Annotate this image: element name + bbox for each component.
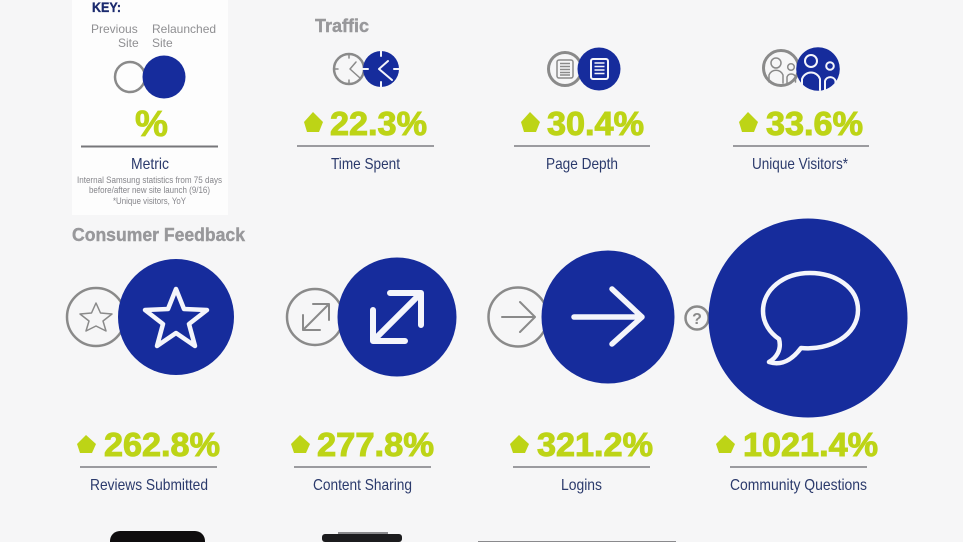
icon: question: ? [692, 311, 702, 328]
key label: relaunched site: Site [152, 36, 173, 50]
device: phone top edge [110, 531, 205, 542]
heading: traffic: Traffic [315, 16, 369, 36]
stat: time spent [297, 105, 434, 173]
key footnote: *Unique visitors, YoY [113, 196, 186, 206]
icon: clock [334, 51, 399, 87]
icon: share [287, 258, 456, 376]
icon: star [67, 259, 234, 375]
key footnote: before/after new site launch (9/16) [89, 185, 210, 195]
stat: time spent: Time Spent [331, 156, 400, 173]
icon: speech bubble [708, 218, 908, 418]
stat: community questions: Community Questions [730, 477, 867, 494]
key circles [115, 56, 186, 98]
stat: page depth: Page Depth [546, 156, 618, 173]
arrow up [304, 112, 323, 132]
panel: key [72, 0, 228, 215]
arrow up [510, 435, 529, 453]
arrow up [291, 435, 310, 453]
arrow up [77, 435, 96, 453]
stat: community questions: 1021.4% [743, 426, 878, 463]
device: third device top edge [478, 541, 676, 542]
stat: reviews submitted: 262.8% [104, 426, 220, 463]
stat: unique visitors [733, 105, 869, 173]
stat: content sharing: 277.8% [317, 426, 434, 463]
stat: time spent: 22.3% [330, 105, 427, 142]
stat: content sharing: Content Sharing [313, 477, 412, 494]
stat: reviews submitted [77, 426, 220, 494]
stat: unique visitors: 33.6% [766, 105, 863, 142]
key label: previous site: Previous [91, 22, 138, 36]
icon: login arrow [488, 250, 674, 384]
key metric label: Metric [131, 156, 169, 173]
arrow up [739, 112, 758, 132]
key label: relaunched site: Relaunched [152, 22, 216, 36]
arrow up [521, 112, 540, 132]
stat: logins [510, 426, 653, 494]
key percent sign: % [135, 103, 168, 144]
icon: users [764, 47, 840, 91]
stat: logins: 321.2% [537, 426, 653, 463]
device: second phone top edge [322, 532, 402, 542]
key label: previous site: Site [118, 36, 139, 50]
stat: unique visitors: Unique Visitors* [752, 156, 848, 173]
icon: question [686, 306, 708, 330]
stat: community questions [716, 426, 878, 494]
arrow up [716, 435, 735, 453]
stat: logins: Logins [561, 477, 602, 494]
stat: reviews submitted: Reviews Submitted [90, 477, 208, 494]
icon: page [548, 48, 620, 90]
stat: content sharing [291, 426, 434, 494]
stat: page depth [514, 105, 650, 173]
key footnote: Internal Samsung statistics from 75 days [77, 175, 222, 185]
heading: consumer feedback: Consumer Feedback [72, 225, 246, 245]
stat: page depth: 30.4% [547, 105, 644, 142]
